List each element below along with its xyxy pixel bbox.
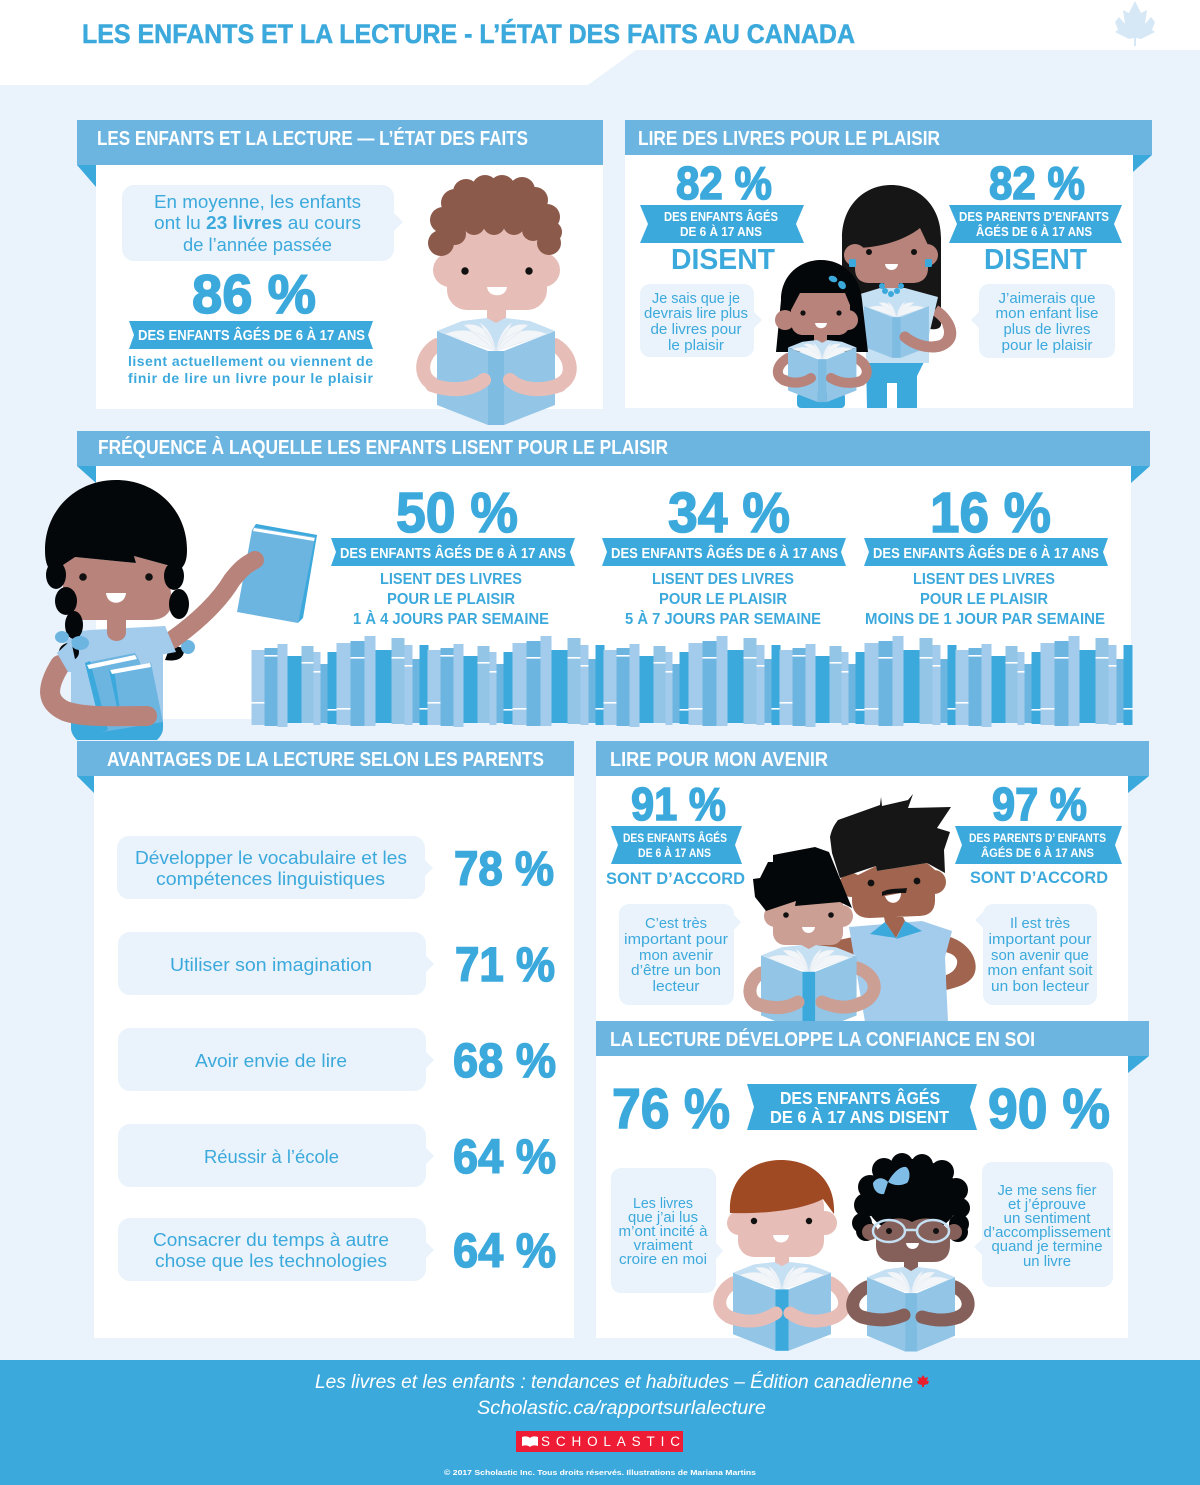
row: envie de lire 68 %: 68 % <box>453 1035 556 1088</box>
speech bubble: enfant: d’être un bon <box>631 962 721 979</box>
row: temps hors technologies 64 %: Consacrer du temps à autre <box>153 1230 389 1250</box>
panel: lire des livres pour le plaisir <box>625 120 1152 408</box>
statistic 86 %: 86 % <box>192 263 316 325</box>
speech bubble: parent <box>975 904 1097 1005</box>
row: reussir a l'ecole 64 % <box>118 1124 556 1187</box>
report url: Scholastic.ca/rapportsurlalecture <box>477 1398 766 1419</box>
panel: la lecture developpe la confiance en soi <box>596 1021 1149 1352</box>
statistic: 82 % parents: DISENT <box>984 244 1087 276</box>
row: vocabulaire 78 %: Développer le vocabulaire et les <box>135 848 407 868</box>
statistic column: 34 %: LISENT DES LIVRES <box>652 571 794 588</box>
report title: Les livres et les enfants : tendances et habitudes – Édition canadienne <box>315 1372 913 1393</box>
illustration: father <box>775 794 976 1022</box>
speech bubble: fille: un sentiment <box>1004 1211 1090 1227</box>
icon: red maple leaf <box>917 1375 929 1387</box>
panel heading: LIRE POUR MON AVENIR <box>610 749 829 771</box>
speech bubble: parent <box>971 284 1115 358</box>
panel heading: LA LECTURE DÉVELOPPE LA CONFIANCE EN SOI <box>610 1028 1035 1051</box>
statistic 76 %: 76 % <box>612 1077 730 1141</box>
statistic 90 %: 90 % <box>988 1077 1110 1141</box>
speech bubble: fille: et j’éprouve <box>1008 1197 1086 1213</box>
speech bubble: 23 livres: ont lu 23 livres au cours <box>154 213 361 233</box>
ribbon: enfants disent <box>747 1084 977 1130</box>
statement text: finir de lire un livre pour le plaisir <box>128 370 374 386</box>
speech bubble: garcon: Les livres <box>633 1196 693 1212</box>
speech bubble: parent: mon enfant lise <box>996 305 1098 322</box>
statistic: 97 % parents: 97 % <box>992 778 1087 830</box>
speech bubble: enfant: de livres pour <box>650 321 742 338</box>
row: reussir a l'ecole 64 %: Réussir à l’école <box>204 1147 339 1167</box>
icon: maple leaf watermark <box>1115 1 1155 46</box>
statistic: 91 % enfants <box>606 778 745 888</box>
row: imagination 71 %: Utiliser son imagination <box>170 955 372 975</box>
statistic: 97 % parents: DES PARENTS D’ ENFANTS <box>969 833 1106 845</box>
statistic column: 50 %: DES ENFANTS ÂGÉS DE 6 À 17 ANS <box>340 544 566 562</box>
speech bubble: parent: mon enfant soit <box>988 962 1093 979</box>
speech bubble: garcon <box>611 1168 723 1293</box>
statistic column: 16 %: MOINS DE 1 JOUR PAR SEMAINE <box>865 611 1105 628</box>
statistic: 82 % enfants <box>640 157 804 276</box>
statistic column: 50 %: 1 À 4 JOURS PAR SEMAINE <box>353 611 549 628</box>
row: imagination 71 % <box>118 932 555 995</box>
statistic column: 50 %: 50 % <box>396 481 518 545</box>
speech bubble: fille: Je me sens fier <box>998 1183 1097 1199</box>
statistic column: 16 % <box>864 481 1108 628</box>
speech bubble: enfant: lecteur <box>652 978 700 995</box>
statistic: 91 % enfants: 91 % <box>631 778 726 830</box>
row: temps hors technologies 64 %: 64 % <box>453 1225 556 1278</box>
panel heading: LIRE DES LIVRES POUR LE PLAISIR <box>638 128 940 150</box>
statistic column: 16 %: 16 % <box>930 481 1051 545</box>
row: vocabulaire 78 %: 78 % <box>454 843 554 896</box>
statistic: 91 % enfants: SONT D’ACCORD <box>606 869 745 888</box>
speech bubble: enfant: C’est très <box>645 915 707 932</box>
statistic column: 34 %: 5 À 7 JOURS PAR SEMAINE <box>625 611 821 628</box>
speech bubble: 23 livres: En moyenne, les enfants <box>154 192 361 212</box>
speech bubble: fille: d’accomplissement <box>984 1225 1110 1241</box>
statistic column: 34 % <box>602 481 846 628</box>
row: envie de lire 68 % <box>118 1028 556 1091</box>
speech bubble: parent: J’aimerais que <box>998 290 1096 307</box>
statistic: 82 % enfants: 82 % <box>676 157 772 209</box>
speech bubble: enfant: mon avenir <box>639 947 713 964</box>
statistic: 82 % parents: ÂGÉS DE 6 À 17 ANS <box>976 224 1092 239</box>
row: reussir a l'ecole 64 %: 64 % <box>453 1131 556 1184</box>
speech bubble: enfant <box>640 284 762 357</box>
statistic: 82 % parents: 82 % <box>989 157 1085 209</box>
panel: les enfants et la lecture <box>77 120 603 425</box>
ribbon: enfants disent: DES ENFANTS ÂGÉS <box>780 1087 940 1108</box>
speech bubble: parent: Il est très <box>1010 915 1070 932</box>
illustration: girl with afro and glasses reading <box>852 1153 970 1352</box>
illustration: girl with braids reaching for a book <box>45 480 317 740</box>
statistic column: 34 %: POUR LE PLAISIR <box>659 591 787 608</box>
speech bubble: parent: important pour <box>988 931 1092 948</box>
copyright: © 2017 Scholastic Inc. Tous droits réservés. Illustrations de Mariana Martins <box>444 1468 756 1477</box>
ribbon: des enfants ages <box>129 321 373 349</box>
speech bubble: garcon: m’ont incité à <box>618 1224 708 1240</box>
speech bubble: parent: son avenir que <box>991 947 1089 964</box>
statement text: lisent actuellement ou viennent de <box>128 353 373 369</box>
statistic: 82 % enfants: DES ENFANTS ÂGÉS <box>664 209 778 224</box>
statistic: 91 % enfants: DE 6 À 17 ANS <box>638 847 711 860</box>
row: temps hors technologies 64 %: chose que les technologies <box>155 1251 387 1271</box>
statistic: 82 % enfants: DE 6 À 17 ANS <box>680 224 762 239</box>
panel heading: FRÉQUENCE À LAQUELLE LES ENFANTS LISENT POUR LE PLAISIR <box>98 436 668 459</box>
ribbon: des enfants ages: DES ENFANTS ÂGÉS DE 6 À 17 ANS <box>138 326 365 344</box>
statistic column: 50 %: POUR LE PLAISIR <box>387 591 515 608</box>
top white header band <box>0 0 1200 85</box>
row: temps hors technologies 64 % <box>118 1218 556 1281</box>
speech bubble: garcon: vraiment <box>634 1238 692 1254</box>
statistic column: 16 %: LISENT DES LIVRES <box>913 571 1055 588</box>
speech bubble: 23 livres <box>122 185 403 261</box>
statistic: 82 % parents <box>949 157 1122 276</box>
statistic column: 50 % <box>331 481 575 628</box>
speech bubble: enfant <box>619 904 741 1005</box>
statistic: 97 % parents: ÂGÉS DE 6 À 17 ANS <box>981 847 1094 860</box>
illustration: red-haired boy reading <box>720 1160 845 1351</box>
speech bubble: enfant: devrais lire plus <box>644 305 748 322</box>
footer band <box>0 1360 1200 1485</box>
statistic column: 34 %: DES ENFANTS ÂGÉS DE 6 À 17 ANS <box>611 544 838 562</box>
speech bubble: fille <box>974 1162 1113 1287</box>
logo: scholastic <box>516 1431 683 1452</box>
statistic: 91 % enfants: DES ENFANTS ÂGÉS <box>623 832 727 845</box>
illustration: girl reading <box>775 260 868 408</box>
speech bubble: enfant: important pour <box>624 931 728 948</box>
speech bubble: enfant: Je sais que je <box>652 290 740 307</box>
speech bubble: parent: plus de livres <box>1004 321 1090 338</box>
panel heading: AVANTAGES DE LA LECTURE SELON LES PARENTS <box>107 749 544 771</box>
panel: lire pour mon avenir <box>596 741 1149 1032</box>
statistic: 82 % parents: DES PARENTS D’ENFANTS <box>959 210 1109 224</box>
logo: scholastic: SCHOLASTIC <box>541 1434 680 1449</box>
panel heading: LES ENFANTS ET LA LECTURE — L’ÉTAT DES FAITS <box>97 127 528 150</box>
statement text <box>128 353 374 386</box>
statistic: 82 % enfants: DISENT <box>671 244 775 276</box>
statistic column: 16 %: POUR LE PLAISIR <box>920 591 1048 608</box>
row: imagination 71 %: 71 % <box>455 939 555 992</box>
row: vocabulaire 78 % <box>117 836 554 899</box>
statistic column: 16 %: DES ENFANTS ÂGÉS DE 6 À 17 ANS <box>873 544 1099 562</box>
statistic: 97 % parents: SONT D’ACCORD <box>970 868 1108 887</box>
speech bubble: 23 livres: de l’année passée <box>183 235 332 255</box>
speech bubble: garcon: croire en moi <box>619 1252 707 1268</box>
panel: frequence de lecture <box>45 431 1150 740</box>
ribbon: enfants disent: DE 6 À 17 ANS DISENT <box>770 1106 949 1127</box>
illustration: curly-haired boy reading <box>423 175 570 425</box>
speech bubble: parent: un bon lecteur <box>991 978 1089 995</box>
speech bubble: fille: quand je termine <box>992 1239 1102 1255</box>
speech bubble: enfant: le plaisir <box>668 337 724 354</box>
row: vocabulaire 78 %: compétences linguistiques <box>156 869 385 889</box>
row: envie de lire 68 %: Avoir envie de lire <box>195 1051 347 1071</box>
illustration: row of books on shelf <box>252 636 1132 727</box>
panel: avantages de la lecture <box>77 741 574 1338</box>
statistic: 97 % parents <box>955 778 1122 887</box>
statistic column: 34 %: 34 % <box>668 481 790 545</box>
speech bubble: parent: pour le plaisir <box>1002 337 1092 354</box>
statistic column: 50 %: LISENT DES LIVRES <box>380 571 522 588</box>
speech bubble: garcon: que j’ai lus <box>628 1210 698 1226</box>
illustration: mother reading <box>842 185 951 408</box>
speech bubble: fille: un livre <box>1023 1254 1071 1270</box>
illustration: boy reading <box>750 847 874 1032</box>
title: LES ENFANTS ET LA LECTURE - L’ÉTAT DES FAITS AU CANADA <box>82 18 855 49</box>
